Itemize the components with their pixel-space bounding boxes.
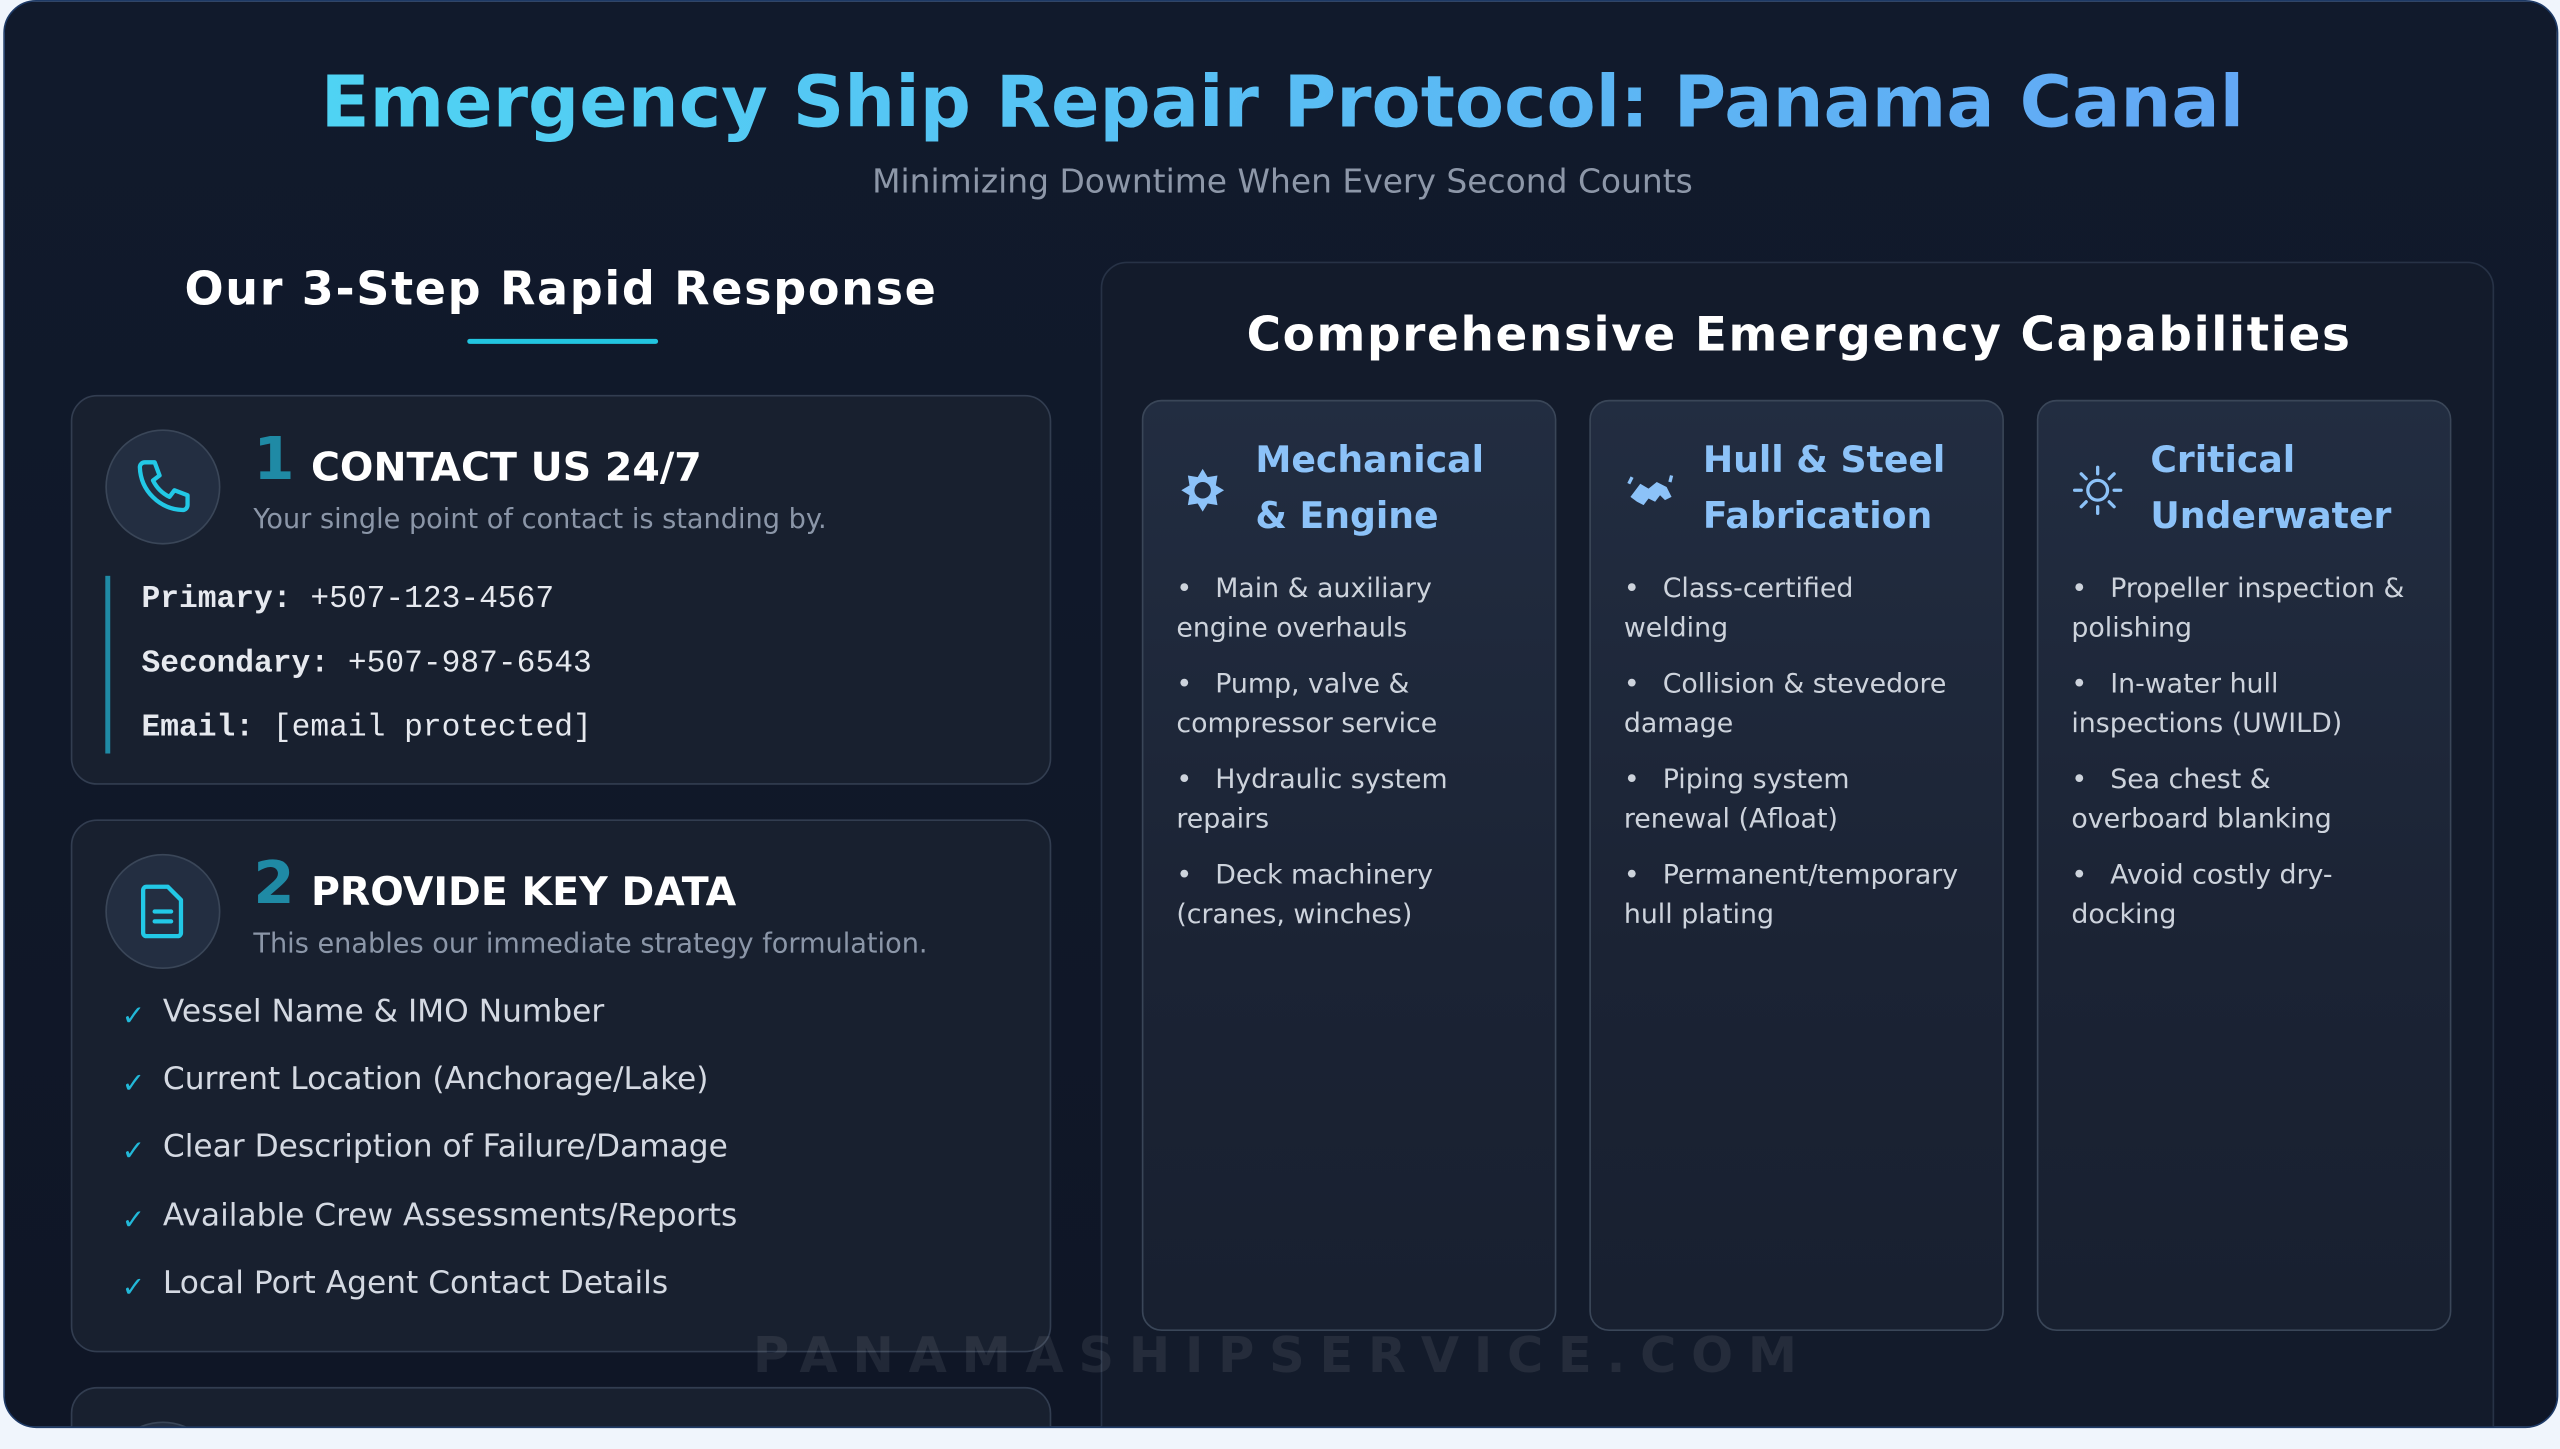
capability: hull: Class-certified welding	[1624, 573, 1853, 643]
icon: welding	[1627, 475, 1674, 506]
checklist: Vessel Name & IMO Number	[163, 994, 604, 1030]
left heading: Our 3-Step Rapid Response	[184, 262, 938, 316]
checklist: Local Port Agent Contact Details	[163, 1265, 668, 1301]
contact details: Secondary: +507-987-6543	[141, 645, 592, 681]
capability: mechanical: & Engine	[1255, 497, 1439, 538]
checklist: Clear Description of Failure/Damage	[163, 1129, 728, 1165]
capability: underwater: Underwater	[2150, 497, 2391, 538]
card 3 (partial)	[71, 1387, 1051, 1449]
watermark: PANAMASHIPSERVICE.COM	[753, 1328, 1812, 1385]
icon: gear	[1181, 469, 1224, 512]
capability: mechanical: Pump, valve & compressor service	[1176, 668, 1437, 739]
panel: capabilities	[1101, 262, 2494, 1449]
checklist	[122, 994, 737, 1305]
capability: hull	[1589, 400, 2004, 1331]
capabilities heading: Comprehensive Emergency Capabilities	[1247, 308, 2352, 362]
capability: underwater: In-water hull inspections (UWILD)	[2071, 668, 2342, 739]
subtitle: Minimizing Downtime When Every Second Counts	[872, 161, 1693, 201]
capability: hull: Collision & stevedore damage	[1624, 668, 1946, 739]
icon: phone	[105, 429, 220, 545]
capability: hull: Piping system renewal (Afloat)	[1624, 763, 1850, 834]
checklist: ✓	[122, 1135, 145, 1168]
checklist: ✓	[122, 1272, 145, 1305]
card 1: contact: 1	[253, 426, 295, 494]
card 1: contact: CONTACT US 24/7	[311, 444, 702, 490]
card 1: contact: Your single point of contact is standing by.	[253, 503, 827, 535]
capability: hull: Fabrication	[1703, 497, 1932, 538]
capability: hull: Hull & Steel	[1703, 441, 1945, 482]
card 2: key data: This enables our immediate strategy formulation.	[253, 928, 928, 959]
capability: mechanical: Hydraulic system repairs	[1176, 763, 1448, 834]
capability: underwater	[2037, 400, 2451, 1331]
checklist: Available Crew Assessments/Reports	[163, 1198, 737, 1234]
card 1: contact	[71, 395, 1051, 785]
card 2: key data: PROVIDE KEY DATA	[311, 869, 736, 915]
capability: underwater: Avoid costly dry-docking	[2071, 859, 2333, 930]
checklist: ✓	[122, 1204, 145, 1237]
title: Emergency Ship Repair Protocol: Panama Canal	[321, 63, 2244, 145]
capability: mechanical	[1142, 400, 1556, 1331]
icon: document	[105, 854, 220, 969]
capability: mechanical: Main & auxiliary engine overhauls	[1176, 573, 1432, 643]
heading underline	[467, 339, 658, 344]
card 2: key data: 2	[253, 851, 295, 918]
checklist: ✓	[122, 1000, 145, 1033]
checklist: ✓	[122, 1068, 145, 1101]
checklist: Current Location (Anchorage/Lake)	[163, 1061, 709, 1097]
capability: underwater: Propeller inspection & polishing	[2071, 573, 2404, 643]
capability: underwater: Critical	[2150, 441, 2295, 482]
capability: mechanical: Deck machinery (cranes, winches)	[1176, 859, 1433, 930]
contact details: Email: [email protected]	[141, 709, 592, 745]
icon: sun	[2073, 466, 2122, 515]
capability: mechanical: Mechanical	[1255, 441, 1484, 482]
card 2: key data	[71, 819, 1051, 1352]
capability: hull: Permanent/temporary hull plating	[1624, 859, 1958, 930]
capability: underwater: Sea chest & overboard blanking	[2071, 763, 2332, 834]
contact details: Primary: +507-123-4567	[141, 581, 554, 617]
contact details	[105, 576, 763, 754]
